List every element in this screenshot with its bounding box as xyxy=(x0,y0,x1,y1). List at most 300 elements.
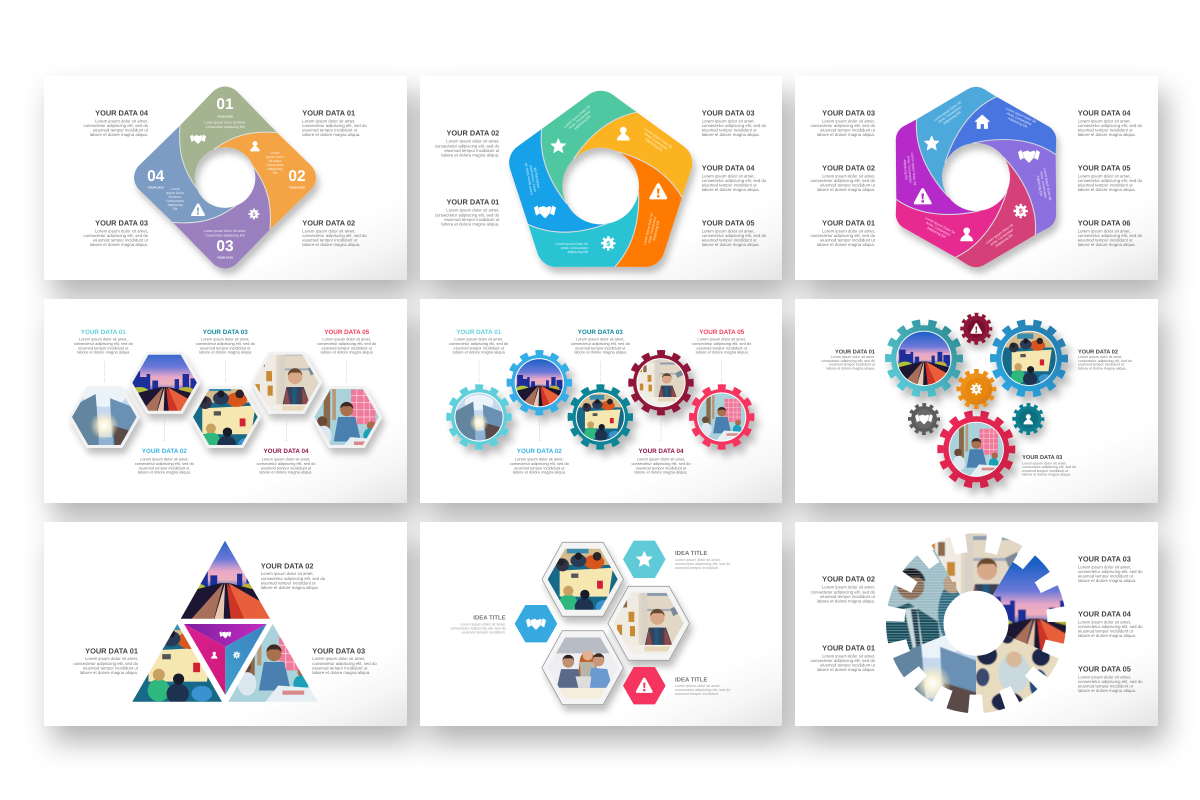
segment labels: Lorem Ipsum Dolor Sit Amet, xyxy=(204,120,246,124)
text: your data 04: YOUR DATA 04 xyxy=(1078,609,1132,618)
segment labels: 04 xyxy=(147,168,165,185)
text: your data 02: YOUR DATA 02 xyxy=(822,163,875,172)
text: your data 02: eiusmod tempor incididunt ut xyxy=(820,182,876,188)
text: your data 04: consectetur adipiscing elit, sed do xyxy=(256,461,316,466)
text: your data 05: Lorem ipsum dolor sit amet, xyxy=(322,337,371,342)
text: idea title bottom: Lorem ipsum dolor sit amet, xyxy=(675,684,720,688)
text: your data 05 xyxy=(1078,163,1143,192)
segment labels: Lorem xyxy=(170,187,180,191)
text: your data 05 xyxy=(702,218,767,247)
text: your data 04 xyxy=(1078,609,1143,638)
text: your data 03: Lorem ipsum dolor sit amet, xyxy=(1078,564,1131,569)
segment captions: Amet, Consectetur xyxy=(989,227,1015,247)
text: your data 02: eiusmod tempor incididunt ut xyxy=(820,594,876,599)
text: your data 02: labore et dolore magna aliqua. xyxy=(1078,366,1127,370)
text: your data 02: YOUR DATA 02 xyxy=(517,448,562,455)
photo triangle: right xyxy=(228,624,318,702)
text: your data 02: consectetur adipiscing elit, sed do xyxy=(435,143,500,148)
text: your data 05: Lorem ipsum dolor sit amet, xyxy=(702,228,755,233)
text: your data 04: labore et dolore magna aliqua. xyxy=(259,470,313,475)
text: your data 01: YOUR DATA 01 xyxy=(81,329,126,336)
text: your data 01: YOUR DATA 01 xyxy=(835,349,875,355)
text: your data 05: consectetur adipiscing elit, sed do xyxy=(692,341,752,346)
text: your data 01: consectetur adipiscing elit, sed do xyxy=(74,661,139,666)
text: your data 01: labore et dolore magna aliqua. xyxy=(441,222,499,226)
text: your data 03: eiusmod tempor incididunt ut xyxy=(1078,574,1134,578)
text: your data 04: eiusmod tempor incididunt ut xyxy=(702,182,757,188)
text: your data 01: Lorem ipsum dolor sit amet, xyxy=(85,656,138,661)
text: your data 02: eiusmod tempor incididunt ut xyxy=(444,148,500,153)
text: your data 05: eiusmod tempor incididunt ut xyxy=(322,345,373,350)
text: your data 05: labore et dolore magna aliqua xyxy=(696,350,749,355)
segment icons xyxy=(190,135,260,219)
text: your data 03: Lorem ipsum dolor sit amet, xyxy=(1022,461,1067,465)
segment labels: Adipiscing xyxy=(167,203,183,207)
segment captions: Adipiscing Elit xyxy=(903,159,908,180)
text: your data 03: YOUR DATA 03 xyxy=(95,218,148,228)
text: your data 03: consectetur adipiscing elit, sed do xyxy=(702,123,767,128)
text: your data 03: eiusmod tempor incididunt ut xyxy=(575,345,626,350)
text: your data 01: eiusmod tempor incididunt ut xyxy=(78,345,129,350)
segment labels: 01 xyxy=(216,96,234,113)
text: your data 03: eiusmod tempor incididunt ut xyxy=(820,128,876,132)
text: your data 03 xyxy=(810,108,876,137)
text: your data 02: consectetur adipiscing elit, sed do xyxy=(1078,359,1132,363)
segment captions: Amet, Consectetur xyxy=(906,155,913,184)
connectors xyxy=(104,361,347,441)
text: your data 03: YOUR DATA 03 xyxy=(702,108,755,117)
panel: idea hexagons xyxy=(420,522,782,726)
text: your data 05: eiusmod tempor incididunt ut xyxy=(1078,182,1133,188)
text: your data 03: eiusmod tempor incididunt ut xyxy=(1022,469,1068,473)
text: your data 01: consectetur adipiscing elit, sed do xyxy=(435,212,500,217)
text: your data 01: YOUR DATA 01 xyxy=(822,218,875,227)
text: your data 01: consectetur adipiscing elit, sed do xyxy=(810,233,876,238)
text: your data 05: labore et dolore magna aliqua. xyxy=(702,242,760,247)
segment captions: Amet, Consectetur xyxy=(528,164,537,192)
segment labels: Lorem Ipsum Dolor Sit Amet, xyxy=(204,229,246,233)
text: your data 03: Lorem ipsum dolor sit amet, xyxy=(702,118,755,123)
text: your data 02: consectetur adipiscing elit, sed do xyxy=(510,461,570,466)
text: your data 02: labore et dolore magna aliqua. xyxy=(817,187,875,192)
segment captions: Amet, Consectetur xyxy=(561,246,589,250)
text: your data 02: labore et dolore magna aliqua. xyxy=(261,585,319,590)
slide background xyxy=(44,76,407,280)
segment labels: YOUR DATA xyxy=(217,256,233,260)
text: your data 03: eiusmod tempor incididunt ut xyxy=(702,128,757,132)
text: idea title left: consectetur adipiscing elit, sed do xyxy=(450,626,506,630)
text: your data 03: YOUR DATA 03 xyxy=(822,108,875,117)
text: your data 03: Lorem ipsum dolor sit amet, xyxy=(576,337,625,342)
text: your data 01 xyxy=(821,349,875,370)
text: your data 01: eiusmod tempor incididunt ut xyxy=(302,128,358,133)
slide background xyxy=(420,522,782,726)
text: idea title bottom: IDEA TITLE xyxy=(675,676,707,683)
text: your data 01: eiusmod tempor incididunt ut xyxy=(83,665,139,670)
text: your data 02: Lorem ipsum dolor sit amet, xyxy=(1078,355,1122,359)
text: your data 04: eiusmod tempor incididunt ut xyxy=(1078,128,1133,132)
text: your data 03: labore et dolore magna aliqua xyxy=(199,350,252,355)
text: your data 01: YOUR DATA 01 xyxy=(822,643,875,652)
text: your data 01: labore et dolore magna aliqua. xyxy=(302,132,360,137)
slide background xyxy=(795,299,1158,503)
text: your data 02: YOUR DATA 02 xyxy=(446,129,499,138)
text: your data 02: YOUR DATA 02 xyxy=(822,575,875,584)
centre triangle xyxy=(184,624,267,695)
text: your data 05: Lorem ipsum dolor sit amet, xyxy=(1078,674,1131,679)
text: your data 02: labore et dolore magna aliqua. xyxy=(441,152,499,158)
text: your data 03: labore et dolore magna aliqua. xyxy=(312,670,370,675)
text: your data 04: YOUR DATA 04 xyxy=(263,448,309,455)
text: your data 01: YOUR DATA 01 xyxy=(456,329,502,336)
text: your data 01 xyxy=(74,646,139,675)
text: your data 02: consectetur adipiscing elit, sed do xyxy=(810,589,876,594)
text: your data 05: consectetur adipiscing elit, sed do xyxy=(1078,679,1143,684)
text: your data 04 xyxy=(84,108,149,137)
text: your data 03: YOUR DATA 03 xyxy=(1022,455,1062,461)
slide background xyxy=(795,522,1158,726)
text: your data 01: Lorem ipsum dolor sit amet, xyxy=(79,337,128,342)
text: your data 02 xyxy=(810,575,876,604)
text: your data 03: labore et dolore magna aliqua xyxy=(574,350,627,355)
panel: hexagon cycle xyxy=(795,76,1158,280)
text: your data 02: YOUR DATA 02 xyxy=(142,448,187,455)
segment captions: Lorem Ipsum Dolor Sit xyxy=(1043,168,1052,201)
text: your data 04: YOUR DATA 04 xyxy=(702,163,755,172)
text: your data 02: Lorem ipsum dolor sit amet, xyxy=(515,457,564,462)
text: your data 04 xyxy=(702,163,767,192)
text: your data 03 xyxy=(84,218,149,247)
text: idea title left: IDEA TITLE xyxy=(473,614,506,621)
segment labels: Ipsum Dolor xyxy=(166,191,185,195)
text: your data 04: YOUR DATA 04 xyxy=(638,448,684,455)
segment captions: Adipiscing Elit xyxy=(573,115,591,131)
text: your data 03: labore et dolore magna aliqua. xyxy=(702,132,760,137)
text: your data 04: eiusmod tempor incididunt ut xyxy=(636,465,687,470)
segment captions xyxy=(524,104,673,254)
segment captions: Lorem Ipsum Dolor Sit xyxy=(643,212,654,245)
text: your data 03: eiusmod tempor incididunt ut xyxy=(200,345,251,350)
text: your data 01: labore et dolore magna aliqua. xyxy=(80,670,138,675)
text: your data 02: consectetur adipiscing elit, sed do xyxy=(261,576,326,581)
segment captions: Amet, Consectetur xyxy=(1006,111,1033,127)
text: idea title left xyxy=(450,614,506,634)
text: your data 01: labore et dolore magna aliqua xyxy=(77,350,130,355)
panel drop shadows xyxy=(52,92,1166,742)
photo hexagon: meeting xyxy=(540,624,626,711)
photo hexagon: team xyxy=(540,536,626,622)
text: your data 05: eiusmod tempor incididunt ut xyxy=(697,345,748,350)
hexagon photos row xyxy=(69,352,388,458)
text: your data 01: eiusmod tempor incididunt ut xyxy=(829,363,875,367)
text: your data 02: labore et dolore magna aliqua. xyxy=(138,470,191,475)
segment labels xyxy=(147,96,306,260)
text: your data 02: YOUR DATA 02 xyxy=(302,218,355,228)
icon hexagon: handshake xyxy=(515,605,557,642)
text: idea title bottom: eiusmod tempor incididunt. xyxy=(675,692,719,696)
text: your data 02: eiusmod tempor incididunt ut xyxy=(139,465,190,470)
text: idea title top xyxy=(675,550,730,570)
segment captions: Lorem Ipsum Dolor Sit xyxy=(925,216,956,235)
text: your data 04: Lorem ipsum dolor sit amet, xyxy=(702,173,755,178)
text: your data 01: labore et dolore magna aliqua. xyxy=(826,366,875,370)
text: idea title top: IDEA TITLE xyxy=(675,550,707,557)
text: your data 05: labore et dolore magna aliqua xyxy=(321,350,374,355)
text: your data 03 xyxy=(196,329,256,355)
connectors xyxy=(479,361,722,441)
text: your data 05 xyxy=(692,329,752,355)
text: your data 04: Lorem ipsum dolor sit amet, xyxy=(1078,619,1131,624)
text: your data 03: labore et dolore magna aliqua. xyxy=(90,242,148,247)
segment labels: YOUR DATA xyxy=(148,186,164,190)
text: your data 01: labore et dolore magna aliqua xyxy=(453,350,506,355)
text: your data 04: YOUR DATA 04 xyxy=(95,108,149,118)
text: your data 02 xyxy=(1078,349,1132,370)
text: your data 05 xyxy=(1078,664,1143,693)
icon hexagon: warning xyxy=(623,667,666,704)
text: idea title top: Lorem ipsum dolor sit amet, xyxy=(675,558,720,562)
segment captions: Adipiscing Elit xyxy=(942,110,962,125)
text: your data 01: eiusmod tempor incididunt ut xyxy=(444,217,500,222)
panel: photo triangle xyxy=(44,522,407,726)
text: your data 02 xyxy=(135,448,195,475)
text: your data 01: YOUR DATA 01 xyxy=(302,108,355,118)
text: your data 02: Lorem ipsum dolor sit amet, xyxy=(822,585,875,590)
text: your data 02: labore et dolore magna aliqua. xyxy=(513,470,566,475)
segment captions: Lorem Ipsum Dolor Sit xyxy=(555,242,588,246)
text: your data 01: eiusmod tempor incididunt ut xyxy=(820,662,876,668)
text: your data 04: YOUR DATA 04 xyxy=(1078,108,1131,117)
text: your data 01: eiusmod tempor incididunt ut xyxy=(454,345,505,350)
text: your data 01 xyxy=(74,329,134,355)
text: your data 01: Lorem ipsum dolor sit amet, xyxy=(822,228,875,233)
text: your data 03: consectetur adipiscing elit, sed do xyxy=(571,341,631,346)
text: your data 04: labore et dolore magna aliqua. xyxy=(90,132,148,137)
text: your data 01: Lorem ipsum dolor sit amet, xyxy=(831,355,875,359)
text: your data 01: Lorem ipsum dolor sit amet, xyxy=(446,208,499,213)
text: your data 01: labore et dolore magna aliqua. xyxy=(817,667,875,672)
text: your data 04: Lorem ipsum dolor sit amet, xyxy=(95,118,148,123)
text: your data 01: Lorem ipsum dolor sit amet, xyxy=(454,337,503,342)
text: your data 01 xyxy=(449,329,509,355)
text: your data 04: consectetur adipiscing elit, sed do xyxy=(631,461,691,466)
text: your data 06: YOUR DATA 06 xyxy=(1078,218,1131,227)
segment labels: Sit Amet, xyxy=(268,159,282,163)
text: your data 02 xyxy=(302,218,367,247)
text: your data 04: eiusmod tempor incididunt ut xyxy=(261,465,312,470)
segment labels: Sit Amet, xyxy=(168,195,182,199)
text: your data 02 xyxy=(810,163,876,192)
segment captions: Amet, Consectetur xyxy=(568,109,592,130)
text: your data 02: labore et dolore magna aliqua. xyxy=(817,598,875,604)
text: your data 04: labore et dolore magna aliqua. xyxy=(1078,633,1136,638)
text: idea title top: consectetur adipiscing elit, sed do xyxy=(675,562,730,566)
text: your data 04: consectetur adipiscing elit, sed do xyxy=(84,123,149,128)
segment captions: Adipiscing Elit xyxy=(1036,175,1043,196)
segment captions: Adipiscing Elit xyxy=(926,226,946,239)
text: your data 06: eiusmod tempor incididunt ut xyxy=(1078,238,1133,242)
text: your data 02: eiusmod tempor incididunt ut xyxy=(302,238,358,243)
text: your data 03: consectetur adipiscing elit, sed do xyxy=(1022,465,1076,469)
slide background xyxy=(44,299,407,503)
segment labels: Elit xyxy=(173,207,177,211)
text: your data 02: consectetur adipiscing elit, sed do xyxy=(302,233,367,238)
text: your data 02: eiusmod tempor incididunt ut xyxy=(1078,363,1124,367)
text: your data 06: Lorem ipsum dolor sit amet, xyxy=(1078,228,1131,233)
text: your data 05: YOUR DATA 05 xyxy=(324,329,370,336)
text: your data 03: labore et dolore magna aliqua. xyxy=(1022,473,1071,477)
photo hexagon: man at desk xyxy=(606,580,692,666)
panel: gear photo timeline xyxy=(420,299,782,503)
slide background xyxy=(795,76,1158,280)
text: your data 05: YOUR DATA 05 xyxy=(702,218,755,227)
text: your data 03: Lorem ipsum dolor sit amet, xyxy=(95,228,148,233)
text: your data 01 xyxy=(435,198,500,226)
segment captions: Adipiscing Elit xyxy=(652,220,660,241)
segment captions: Lorem Ipsum Dolor Sit xyxy=(910,152,917,186)
text: your data 01: consectetur adipiscing elit, sed do xyxy=(449,341,509,346)
text: your data 02: labore et dolore magna aliqua. xyxy=(302,242,360,247)
text: your data 02: consectetur adipiscing elit, sed do xyxy=(810,178,876,183)
segment labels: Adipiscing xyxy=(267,167,283,171)
text: your data 01 xyxy=(810,218,876,247)
segment labels: 03 xyxy=(216,238,234,255)
text: your data 01: labore et dolore magna aliqua. xyxy=(817,242,875,247)
text: your data 03: consectetur adipiscing elit, sed do xyxy=(1078,569,1143,574)
slide background xyxy=(420,299,782,503)
text: idea title bottom: consectetur adipiscing elit, sed do xyxy=(675,688,730,692)
text: your data 05: labore et dolore magna aliqua. xyxy=(1078,688,1136,693)
segment labels: YOUR DATA xyxy=(289,186,305,190)
segment labels: Consectetur xyxy=(266,163,285,167)
text: your data 06: labore et dolore magna aliqua. xyxy=(1078,242,1136,247)
text: your data 02 xyxy=(261,561,326,590)
segment captions: Lorem Ipsum Dolor Sit xyxy=(644,127,673,149)
panel: interlocking gears xyxy=(795,299,1158,503)
segment captions: Lorem Ipsum Dolor Sit xyxy=(985,223,1014,245)
text: your data 04: eiusmod tempor incididunt ut xyxy=(93,128,149,133)
text: your data 05: YOUR DATA 05 xyxy=(1078,664,1131,673)
text: your data 03: eiusmod tempor incididunt ut xyxy=(312,665,368,670)
text: idea title left: Lorem ipsum dolor sit amet, xyxy=(460,622,506,626)
text: your data 02: Lorem ipsum dolor sit amet, xyxy=(302,228,355,233)
text: your data 02 xyxy=(510,448,570,475)
text: your data 02 xyxy=(435,129,500,158)
text: your data 04 xyxy=(631,448,691,475)
text: your data 05: eiusmod tempor incididunt ut xyxy=(702,238,757,242)
gear photos row xyxy=(449,353,751,447)
segment labels: YOUR DATA xyxy=(217,114,233,118)
text: your data 03: labore et dolore magna aliqua. xyxy=(1078,578,1136,583)
text: your data 03: consectetur adipiscing elit, sed do xyxy=(196,341,256,346)
segment icons xyxy=(914,114,1040,241)
chart: hexagon six-segment swirl xyxy=(868,80,1084,274)
text: your data 05: YOUR DATA 05 xyxy=(699,329,745,336)
photo triangle: left xyxy=(132,624,222,702)
segment captions: Amet, Consectetur xyxy=(644,132,669,151)
panel: rounded diamond cycle xyxy=(44,76,407,280)
text: your data 04 xyxy=(1078,108,1143,137)
text: idea title left: eiusmod tempor incididunt. xyxy=(462,630,506,634)
segment captions: Adipiscing Elit xyxy=(1007,116,1028,129)
text: your data 04: Lorem ipsum dolor sit amet, xyxy=(262,457,310,462)
segment labels: 02 xyxy=(288,168,306,185)
text: your data 05: Lorem ipsum dolor sit amet, xyxy=(697,337,746,342)
segment captions: Adipiscing Elit xyxy=(994,233,1014,248)
panel: hexagon photo timeline xyxy=(44,299,407,503)
segment labels: Consectetur Adipiscing Elit xyxy=(205,234,245,238)
text: your data 03: consectetur adipiscing elit, sed do xyxy=(84,233,149,238)
text: your data 02: YOUR DATA 02 xyxy=(1078,349,1118,355)
text: your data 02: Lorem ipsum dolor sit amet, xyxy=(446,139,499,144)
text: your data 03: YOUR DATA 03 xyxy=(203,329,248,336)
text: your data 03: consectetur adipiscing elit, sed do xyxy=(312,661,377,666)
text: your data 03 xyxy=(1078,554,1143,583)
text: your data 04: Lorem ipsum dolor sit amet, xyxy=(637,457,685,462)
segment captions xyxy=(902,100,1052,252)
text: your data 04 xyxy=(256,448,316,475)
segment captions: Amet, Consectetur xyxy=(925,221,952,237)
segment captions: Amet, Consectetur xyxy=(1039,171,1048,200)
chart: pentagon five-segment swirl xyxy=(492,91,705,298)
text: your data 01: Lorem ipsum dolor sit amet, xyxy=(302,118,355,123)
text: your data 01: YOUR DATA 01 xyxy=(446,198,499,207)
text: your data 02: Lorem ipsum dolor sit amet, xyxy=(140,457,189,462)
text: your data 03: Lorem ipsum dolor sit amet, xyxy=(201,337,250,342)
text: your data 03: YOUR DATA 03 xyxy=(312,646,365,655)
text: your data 03 xyxy=(1022,455,1076,477)
puzzle gear of five photos xyxy=(886,533,1066,713)
text: your data 04: labore et dolore magna aliqua. xyxy=(1078,132,1136,137)
text: your data 04: consectetur adipiscing elit, sed do xyxy=(1078,624,1143,629)
text: your data 04: eiusmod tempor incididunt ut xyxy=(1078,628,1134,634)
text: your data 03: YOUR DATA 03 xyxy=(1078,554,1131,563)
text: your data 05: eiusmod tempor incididunt ut xyxy=(1078,684,1134,688)
text: your data 04: consectetur adipiscing elit, sed do xyxy=(1078,123,1143,128)
text: your data 01: Lorem ipsum dolor sit amet, xyxy=(822,653,875,658)
text: your data 04: labore et dolore magna aliqua. xyxy=(702,187,760,192)
segment icons xyxy=(534,127,667,249)
text: your data 03 xyxy=(571,329,631,355)
text: your data 01: consectetur adipiscing elit, sed do xyxy=(821,359,875,363)
text: your data 05: consectetur adipiscing elit, sed do xyxy=(702,233,767,238)
text: your data 05 xyxy=(317,329,377,355)
segment captions: Lorem Ipsum Dolor Sit xyxy=(563,104,591,129)
text: your data 03 xyxy=(702,108,767,137)
text: your data 02: eiusmod tempor incididunt ut xyxy=(514,465,565,470)
text: your data 04: Lorem ipsum dolor sit amet, xyxy=(1078,118,1131,123)
text: your data 01: YOUR DATA 01 xyxy=(85,646,138,655)
segment captions: Amet, Consectetur xyxy=(937,105,963,124)
text: your data 01: consectetur adipiscing elit, sed do xyxy=(74,341,134,346)
segment captions: Amet, Consectetur xyxy=(647,215,657,244)
text: your data 05: consectetur adipiscing elit, sed do xyxy=(1078,178,1143,183)
photo triangle: top xyxy=(180,540,270,619)
segment labels: Ipsum Dolor xyxy=(266,155,285,159)
text: your data 01: consectetur adipiscing elit, sed do xyxy=(810,658,876,663)
text: your data 05: Lorem ipsum dolor sit amet, xyxy=(1078,173,1131,178)
panel: pentagon cycle xyxy=(420,76,782,298)
text: your data 03 xyxy=(312,646,377,675)
text: your data 03: eiusmod tempor incididunt ut xyxy=(93,238,149,243)
text: your data 06 xyxy=(1078,218,1143,247)
text: your data 04: labore et dolore magna aliqua. xyxy=(634,470,688,475)
segment captions: Adipiscing Elit xyxy=(644,137,663,152)
text: your data 02: YOUR DATA 02 xyxy=(261,561,314,570)
chart: diamond four-segment swirl xyxy=(134,87,316,268)
slide background xyxy=(44,522,407,726)
text: your data 03: Lorem ipsum dolor sit amet, xyxy=(312,656,365,661)
